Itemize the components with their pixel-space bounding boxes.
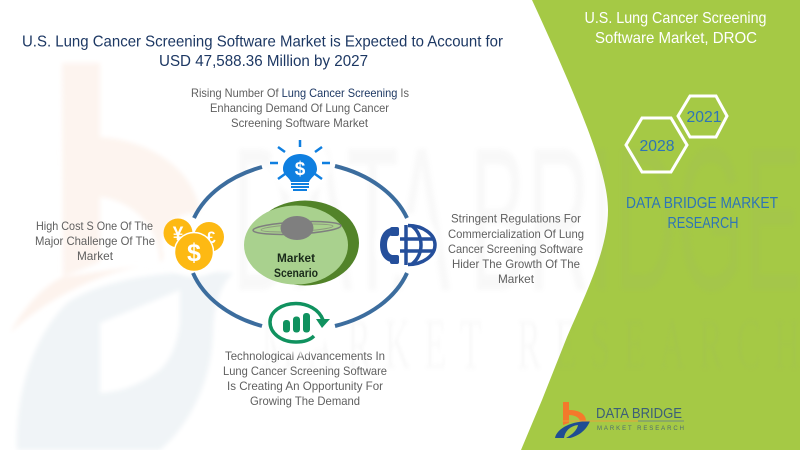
text block: restraints: Stringent Regulations For [451, 212, 581, 226]
icon: light bulb with dollar [270, 140, 330, 190]
icon: growth chart [270, 304, 330, 342]
text block: challenges: Market [77, 249, 114, 263]
text block: opportunities: Is Creating An Opportunity For [227, 379, 383, 393]
text block: opportunities: Technological Advancements In [225, 349, 385, 363]
hexagon: 2021 [678, 96, 727, 137]
logo: data bridge: DATA BRIDGE [596, 405, 682, 422]
watermark: logo [10, 63, 233, 450]
text block: challenges: High Cost S One Of The [36, 219, 153, 233]
text block: opportunities: Growing The Demand [250, 394, 360, 408]
icon: planet [253, 216, 341, 240]
text block: opportunities [223, 349, 387, 408]
heading: panel title [584, 10, 766, 47]
ring segments [193, 166, 407, 326]
icon: coins: ¥ [173, 224, 184, 245]
hexagon: 2028: 2028 [640, 138, 675, 155]
panel: green side panel [521, 0, 800, 450]
logo: data bridge: MARKET RESEARCH [597, 426, 684, 432]
text block: restraints: Commercialization Of Lung [448, 227, 584, 241]
text block: challenges [35, 219, 155, 263]
logo: data bridge [555, 402, 684, 438]
hexagon: 2021: 2021 [686, 109, 722, 126]
text block: drivers: Enhancing Demand Of Lung Cancer [210, 101, 389, 115]
text block: restraints: Hider The Growth Of The [452, 257, 580, 271]
text block: data bridge market research: RESEARCH [668, 215, 738, 232]
text block: drivers [191, 86, 409, 130]
title: U.S. Lung Cancer Screening Software Market is Expected to Account for [22, 34, 504, 50]
text block: restraints: Market [498, 272, 535, 286]
heading: panel title: U.S. Lung Cancer Screening [584, 10, 766, 27]
text block: drivers: Rising Number Of Lung Cancer Screening Is [191, 86, 409, 100]
icon: coins: $ [187, 239, 201, 267]
text block: restraints: Cancer Screening Software [448, 242, 583, 256]
text block: data bridge market research: DATA BRIDGE MARKET [626, 195, 778, 212]
label: market scenario: Scenario [274, 268, 318, 280]
text block: restraints [448, 212, 584, 286]
icon: coins: £ [206, 228, 216, 247]
text block: data bridge market research [626, 195, 778, 232]
center: market scenario [244, 200, 359, 286]
text block: challenges: Major Challenge Of The [35, 234, 155, 248]
icon: light bulb with dollar: $ [295, 159, 306, 180]
title [22, 34, 504, 70]
icon: coins [164, 218, 224, 272]
title: USD 47,588.36 Million by 2027 [159, 53, 368, 70]
label: market scenario [274, 253, 318, 280]
icon: phone and globe [384, 225, 435, 265]
watermark: tagline: MARKET RESEARCH [262, 305, 800, 384]
label: market scenario: Market [277, 253, 315, 265]
text block: opportunities: Lung Cancer Screening Software [223, 364, 387, 378]
hexagon: 2028 [626, 118, 687, 172]
heading: panel title: Software Market, DROC [595, 30, 757, 47]
text block: drivers: Screening Software Market [231, 116, 369, 130]
